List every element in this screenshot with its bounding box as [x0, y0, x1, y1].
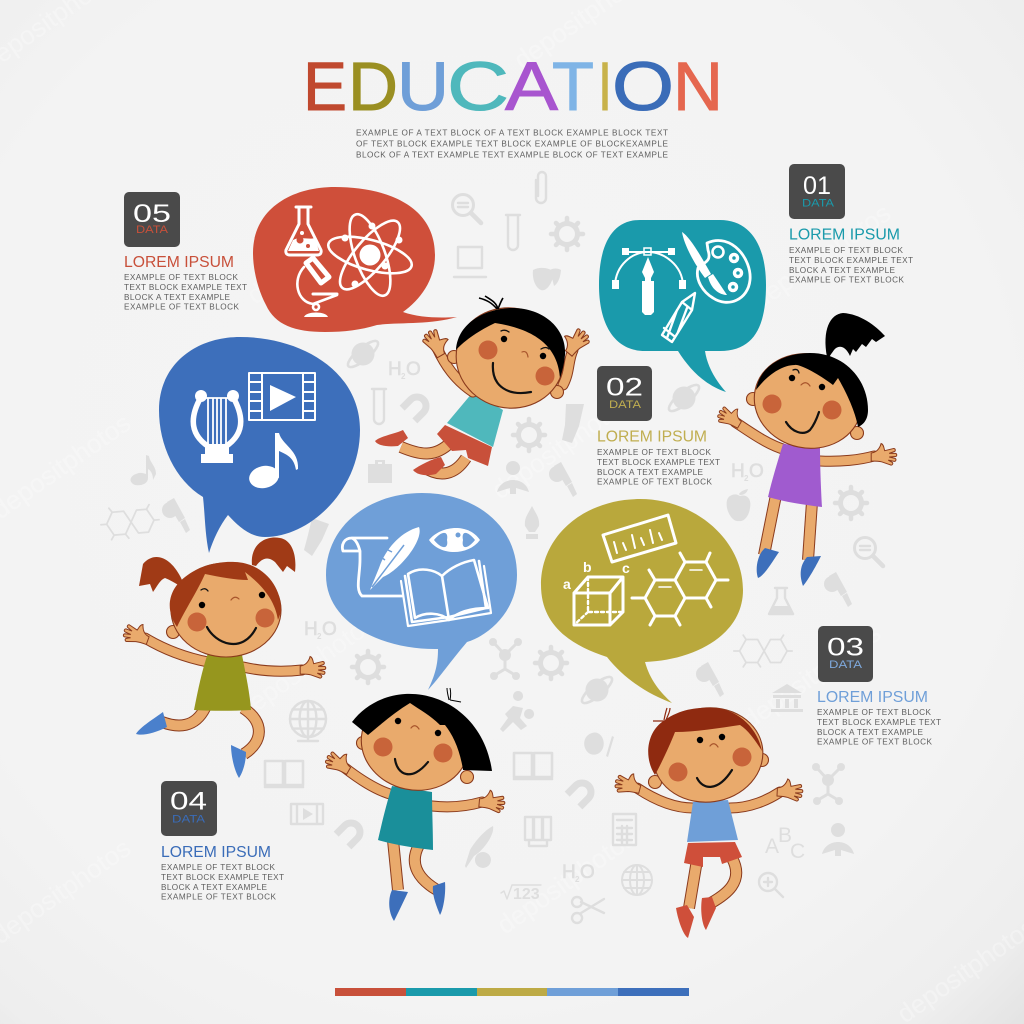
badge 02 [597, 366, 652, 421]
icon: museum [771, 684, 803, 712]
head [447, 296, 573, 418]
icon: flask [286, 207, 321, 255]
icon: magnet [567, 779, 595, 807]
icon: book [514, 753, 552, 779]
icon: feather [465, 826, 493, 868]
arms and hands [613, 770, 803, 808]
text 02: TEXT BLOCK EXAMPLE TEXT [597, 458, 720, 467]
title: U [397, 48, 449, 125]
icon: film [291, 804, 323, 824]
text 03: TEXT BLOCK EXAMPLE TEXT [817, 718, 941, 727]
icon: magnifier plus [759, 873, 783, 897]
icon: music note [131, 455, 156, 485]
icon: microscope [297, 258, 337, 317]
icon: pen nib [525, 506, 539, 539]
character: girl in purple dress [715, 313, 897, 586]
watermark: depositphotos [231, 607, 381, 725]
icon: briefcase [368, 460, 392, 483]
text 04: EXAMPLE OF TEXT BLOCK [161, 892, 277, 902]
dress [768, 444, 822, 507]
icon: test tube [506, 215, 520, 250]
text 03: EXAMPLE OF TEXT BLOCK [817, 708, 932, 717]
title: D [348, 48, 398, 125]
icon: globe on stand [290, 701, 326, 741]
text 05 [124, 273, 247, 312]
shirt [447, 392, 503, 447]
shoes [375, 430, 445, 475]
legs [401, 442, 466, 473]
icon: book [265, 761, 303, 787]
heading 05: LOREM IPSUM [124, 254, 234, 271]
icon: music note [247, 433, 298, 491]
text 01 [789, 246, 913, 284]
icon: magnifier [854, 538, 883, 566]
text 04 [161, 863, 284, 902]
legs [764, 495, 812, 560]
icon: planet [345, 337, 381, 371]
badge 04: 04 [170, 788, 207, 816]
title: A [505, 48, 558, 125]
arms and hands [121, 619, 326, 678]
badge 03 [818, 626, 873, 682]
icon: H2O [562, 862, 595, 884]
icon: cube with labels: c [622, 560, 630, 576]
back arm and hand [558, 324, 593, 385]
info block 03 [817, 626, 941, 746]
icon: student [497, 461, 529, 494]
icon: lyre [193, 390, 241, 463]
badge 05 [124, 192, 180, 247]
icon: ABC: C [790, 840, 805, 863]
icon: magnifier [452, 194, 481, 223]
icon: gear [513, 419, 545, 451]
icon: paint brush [304, 518, 329, 556]
icon: apple [727, 489, 750, 521]
text 04: BLOCK A TEXT EXAMPLE [161, 883, 268, 892]
icon: gear [535, 647, 567, 679]
icon: magnet [336, 819, 364, 847]
shorts [437, 425, 492, 466]
badge 01: 01 [803, 172, 831, 200]
icon: atom [325, 209, 415, 301]
subtitle text block: BLOCK OF A TEXT EXAMPLE TEXT EXAMPLE BLOCK OF TEXT EXAMPLE [356, 150, 669, 160]
icon: square root 123: 123 [513, 886, 540, 903]
shorts [684, 842, 742, 867]
speech bubble: science [253, 187, 457, 332]
arms and hands [715, 402, 897, 465]
speech bubble: maths and geometry [541, 499, 743, 703]
speech bubble: reading [326, 493, 517, 690]
icon: test tube [372, 389, 386, 424]
text 03 [817, 708, 941, 746]
watermark: depositphotos [491, 822, 641, 940]
subtitle text block: OF TEXT BLOCK EXAMPLE TEXT BLOCK EXAMPLE OF BLOCKEXAMPLE [356, 140, 669, 148]
badge 04: DATA [172, 814, 206, 826]
background icon pattern [100, 172, 883, 923]
icon: calculator [613, 814, 636, 845]
character: boy in blue shirt [613, 701, 803, 938]
icon: pillars [525, 817, 551, 846]
title [303, 48, 723, 125]
text 01: EXAMPLE OF TEXT BLOCK [789, 246, 904, 255]
pigtails [139, 537, 295, 592]
icon: student [822, 823, 854, 856]
icon: scroll [342, 538, 402, 596]
icon: planet [666, 381, 702, 415]
front arm and hand [420, 325, 473, 392]
text 03: BLOCK A TEXT EXAMPLE [817, 728, 924, 737]
text 04: EXAMPLE OF TEXT BLOCK [161, 863, 276, 872]
text 02: EXAMPLE OF TEXT BLOCK [597, 448, 712, 457]
icon: hexagon molecule [632, 553, 728, 625]
badge 03: 03 [827, 634, 864, 662]
character: boy in teal shirt [375, 296, 593, 475]
icon: feather [370, 527, 420, 590]
icon: gear [352, 651, 384, 683]
icon: palette and brush [682, 232, 750, 302]
icon: eye [429, 528, 480, 552]
shoes [757, 548, 821, 586]
text 03: EXAMPLE OF TEXT BLOCK [817, 738, 933, 746]
info block 04 [161, 781, 284, 902]
legs [689, 858, 736, 908]
icon: planet [579, 673, 615, 707]
icon: globe [622, 865, 652, 895]
icon: telescope [824, 572, 852, 607]
icon: scissors [572, 897, 604, 923]
icon: H2O [388, 359, 421, 381]
badge 05: 05 [133, 200, 171, 228]
dress [194, 653, 251, 711]
icon: cube with labels: a [563, 576, 571, 592]
icon: telescope [696, 662, 724, 697]
icon: molecule [489, 638, 522, 680]
legs [393, 840, 437, 890]
icon: masks [533, 268, 561, 290]
badge 05: DATA [136, 224, 169, 236]
icon: H2O [304, 619, 337, 641]
head [745, 344, 871, 458]
title: N [673, 48, 723, 125]
icon: runner [500, 691, 534, 732]
shoes [136, 712, 246, 778]
badge 02: 02 [606, 374, 643, 402]
badge 01: DATA [802, 198, 835, 210]
text 01: TEXT BLOCK EXAMPLE TEXT [789, 256, 913, 265]
icon: open book [401, 560, 491, 626]
icon: pencil [662, 293, 695, 342]
badge 01 [789, 164, 845, 219]
speech bubble: arts and music [159, 337, 360, 553]
head [647, 701, 769, 809]
text 05: EXAMPLE OF TEXT BLOCK [124, 273, 239, 282]
shoes [676, 897, 716, 938]
title: I [598, 48, 612, 125]
legs [162, 708, 259, 754]
arms and hands [322, 746, 506, 813]
badge 03: DATA [829, 659, 863, 671]
speech bubble: design and drawing [599, 220, 766, 392]
badge 02: DATA [609, 399, 642, 411]
icon: square root 123 [501, 885, 541, 903]
icon: H2O [731, 461, 764, 483]
shoes [389, 882, 445, 921]
subtitle text block [356, 128, 669, 160]
icon: ABC: A [765, 835, 779, 858]
badge 04 [161, 781, 217, 836]
icon: flask [769, 588, 793, 614]
icon: telescope [549, 462, 577, 497]
icon: film with play button [249, 373, 315, 420]
head [352, 686, 492, 800]
icon: ABC [765, 824, 805, 863]
icon: cube with labels: b [583, 559, 592, 575]
text 02 [597, 448, 720, 486]
icon: computer [454, 247, 486, 277]
text 05: BLOCK A TEXT EXAMPLE [124, 293, 231, 302]
icon: paint brush [562, 404, 584, 443]
title: E [303, 48, 347, 125]
character: girl in teal dress [322, 686, 506, 921]
subtitle text block: EXAMPLE OF A TEXT BLOCK OF A TEXT BLOCK EXAMPLE BLOCK TEXT [356, 128, 668, 138]
watermark: depositphotos [486, 387, 636, 505]
character: girl in olive dress [121, 537, 326, 778]
icon: magnet [402, 393, 430, 421]
watermark: depositphotos [736, 617, 886, 735]
heading 01: LOREM IPSUM [789, 226, 900, 244]
title: T [552, 48, 594, 125]
text 05: EXAMPLE OF TEXT BLOCK [124, 302, 240, 312]
bottom colour bar [335, 988, 689, 996]
icon: gear [551, 218, 583, 250]
text 01: EXAMPLE OF TEXT BLOCK [789, 276, 905, 284]
icon: ABC: B [778, 824, 792, 847]
shirt [687, 800, 738, 842]
heading 03: LOREM IPSUM [817, 689, 928, 706]
heading 04: LOREM IPSUM [161, 844, 271, 861]
info block 05 [124, 192, 247, 312]
watermark: depositphotos [241, 192, 391, 310]
title: O [612, 48, 674, 125]
text 02: EXAMPLE OF TEXT BLOCK [597, 478, 713, 486]
icon: bezier pen tool [612, 248, 686, 315]
icon: palette [584, 732, 614, 757]
text 01: BLOCK A TEXT EXAMPLE [789, 266, 896, 275]
icon: ruler [603, 515, 676, 562]
dress [378, 786, 433, 850]
ponytail [825, 313, 885, 358]
icon: telescope [162, 498, 190, 533]
icon: hexagons [734, 635, 792, 667]
info block 01 [789, 164, 913, 284]
text 02: BLOCK A TEXT EXAMPLE [597, 468, 704, 477]
title: C [447, 48, 509, 125]
icon: hexagons [100, 504, 160, 541]
icon: molecule [812, 763, 845, 805]
icon: cube with labels [563, 559, 630, 625]
watermark: depositphotos [746, 197, 896, 315]
text 04: TEXT BLOCK EXAMPLE TEXT [161, 873, 284, 882]
icon: gear [835, 487, 867, 519]
head [166, 562, 281, 657]
icon: paperclip [536, 172, 546, 203]
text 05: TEXT BLOCK EXAMPLE TEXT [124, 283, 247, 292]
heading 02: LOREM IPSUM [597, 428, 707, 446]
info block 02 [597, 366, 720, 486]
